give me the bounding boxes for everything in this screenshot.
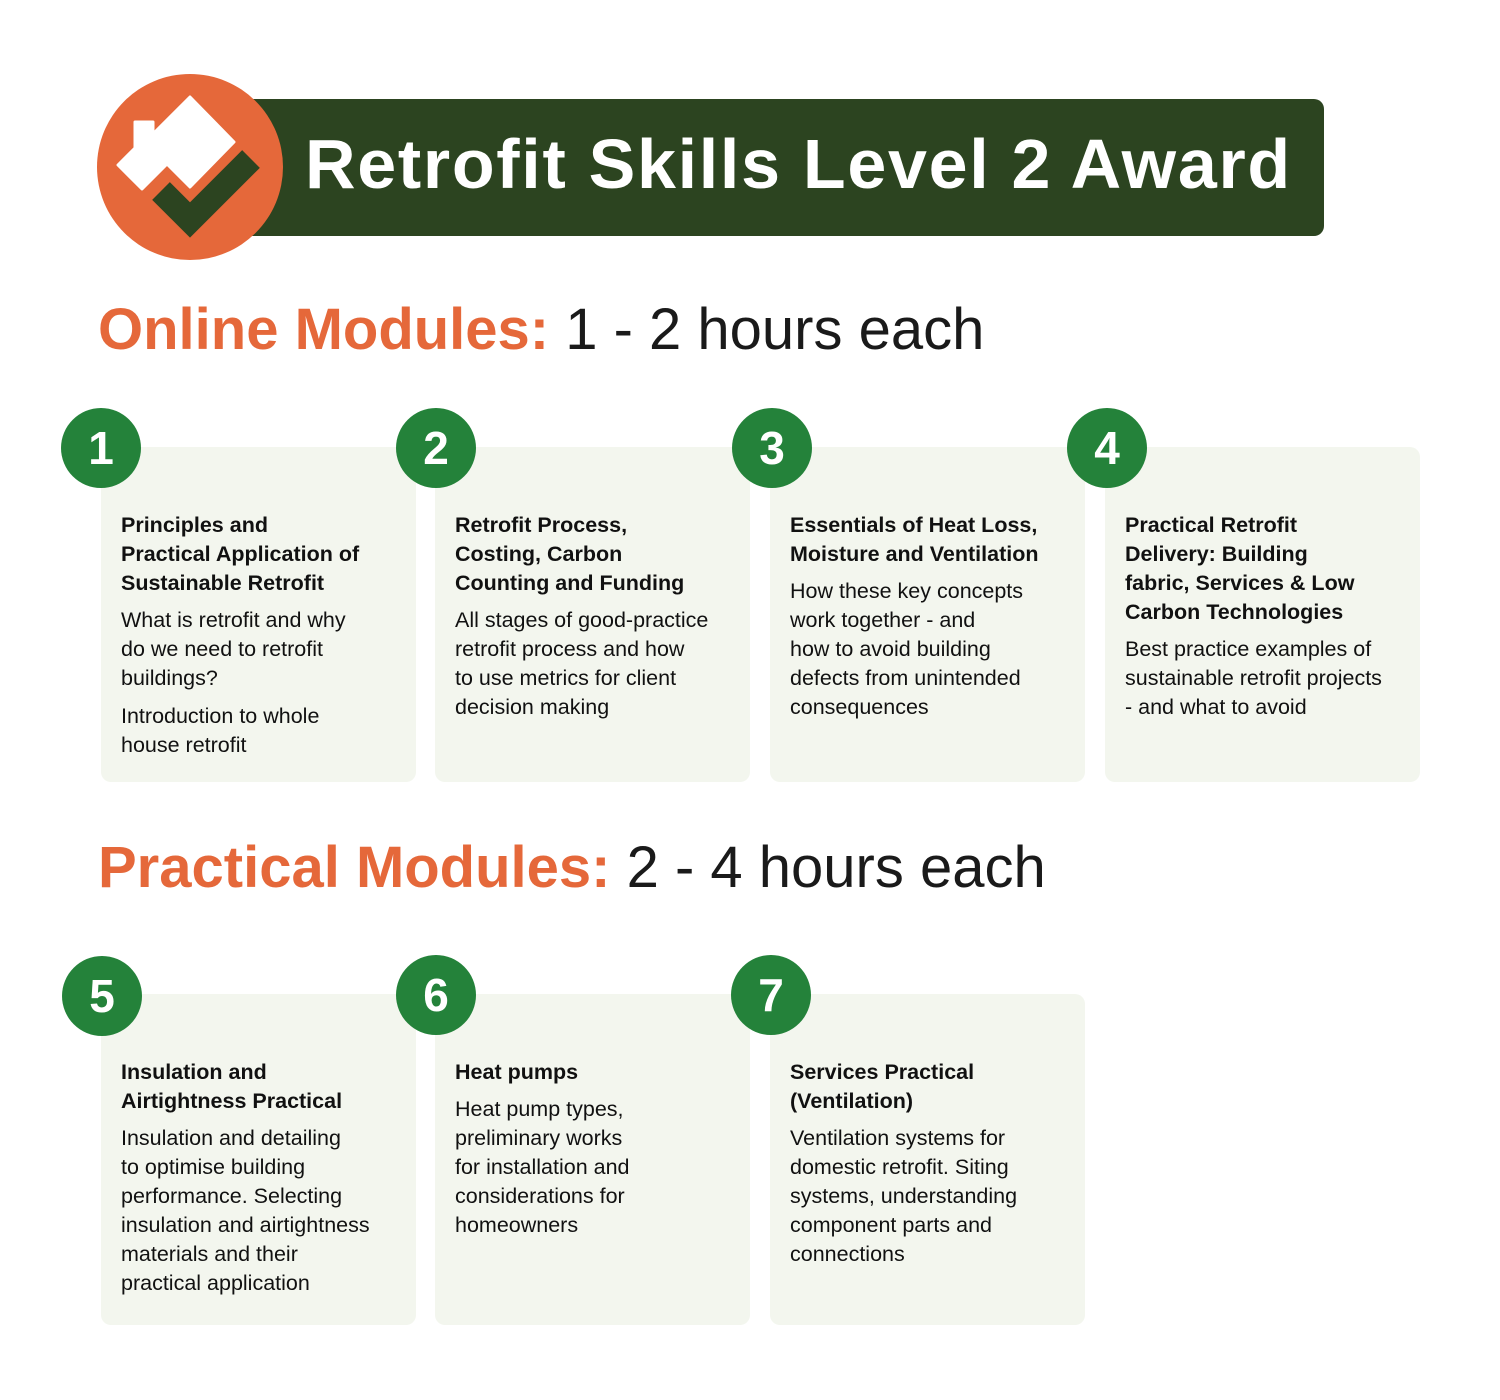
card 1: Sustainable Retrofit (121, 571, 324, 595)
card 2: retrofit process and how (455, 637, 684, 661)
card 3: consequences (790, 695, 929, 719)
card 7: (Ventilation) (790, 1089, 913, 1113)
number 5: 5 (89, 970, 115, 1022)
card 2: Retrofit Process, (455, 513, 627, 537)
number 6: 6 (423, 969, 449, 1021)
number 7 (731, 955, 811, 1035)
card 3: How these key concepts (790, 579, 1023, 603)
card 5: Insulation and detailing (121, 1126, 341, 1150)
card 6: Heat pumps (455, 1060, 578, 1084)
card 1: Principles and (121, 513, 268, 537)
card 5: Insulation and (121, 1060, 267, 1084)
card 5 (101, 994, 416, 1325)
number 2: 2 (423, 422, 449, 474)
card 2: to use metrics for client (455, 666, 676, 690)
card 6: preliminary works (455, 1126, 622, 1150)
card 6: Heat pump types, (455, 1097, 624, 1121)
card 4: fabric, Services & Low (1125, 571, 1354, 595)
card 1: buildings? (121, 666, 218, 690)
card 5: performance. Selecting (121, 1184, 342, 1208)
card 2: Counting and Funding (455, 571, 684, 595)
card 3: how to avoid building (790, 637, 991, 661)
card 1 (101, 447, 416, 782)
card 7: Services Practical (790, 1060, 974, 1084)
card 7: component parts and (790, 1213, 992, 1237)
card 2: Costing, Carbon (455, 542, 622, 566)
number 6 (396, 955, 476, 1035)
card 7: Ventilation systems for (790, 1126, 1005, 1150)
card 4: - and what to avoid (1125, 695, 1307, 719)
heading: practical: Practical Modules: 2 - 4 hours each (98, 835, 1046, 900)
card 2 (435, 447, 750, 782)
number 7: 7 (758, 969, 784, 1021)
card 4: Delivery: Building (1125, 542, 1308, 566)
card 1: Introduction to whole (121, 704, 319, 728)
card 6: homeowners (455, 1213, 578, 1237)
card 4: Best practice examples of (1125, 637, 1371, 661)
card 1: Practical Application of (121, 542, 359, 566)
card 6 (435, 994, 750, 1325)
heading: online: Online Modules: 1 - 2 hours each (98, 297, 984, 362)
card 5: to optimise building (121, 1155, 305, 1179)
number 2 (396, 408, 476, 488)
number 4 (1067, 408, 1147, 488)
title: Retrofit Skills Level 2 Award (305, 125, 1292, 203)
card 5: insulation and airtightness (121, 1213, 370, 1237)
card 1: What is retrofit and why (121, 608, 346, 632)
card 7: systems, understanding (790, 1184, 1017, 1208)
card 1: house retrofit (121, 733, 246, 757)
card 4 (1105, 447, 1420, 782)
banner (240, 99, 1324, 236)
card 3: Moisture and Ventilation (790, 542, 1038, 566)
card 6: considerations for (455, 1184, 625, 1208)
card 7 (770, 994, 1085, 1325)
logo (97, 74, 283, 260)
card 2: decision making (455, 695, 609, 719)
card 5: Airtightness Practical (121, 1089, 342, 1113)
card 5: practical application (121, 1271, 310, 1295)
card 4: Practical Retrofit (1125, 513, 1297, 537)
card 5: materials and their (121, 1242, 298, 1266)
card 3: work together - and (790, 608, 975, 632)
number 5 (62, 956, 142, 1036)
card 4: sustainable retrofit projects (1125, 666, 1382, 690)
card 1: do we need to retrofit (121, 637, 323, 661)
card 6: for installation and (455, 1155, 630, 1179)
number 1: 1 (88, 422, 114, 474)
card 7: domestic retrofit. Siting (790, 1155, 1009, 1179)
card 3 (770, 447, 1085, 782)
card 3: Essentials of Heat Loss, (790, 513, 1037, 537)
number 3: 3 (759, 422, 785, 474)
card 2: All stages of good-practice (455, 608, 708, 632)
card 7: connections (790, 1242, 905, 1266)
number 1 (61, 408, 141, 488)
card 3: defects from unintended (790, 666, 1021, 690)
card 4: Carbon Technologies (1125, 600, 1343, 624)
number 3 (732, 408, 812, 488)
number 4: 4 (1094, 422, 1120, 474)
